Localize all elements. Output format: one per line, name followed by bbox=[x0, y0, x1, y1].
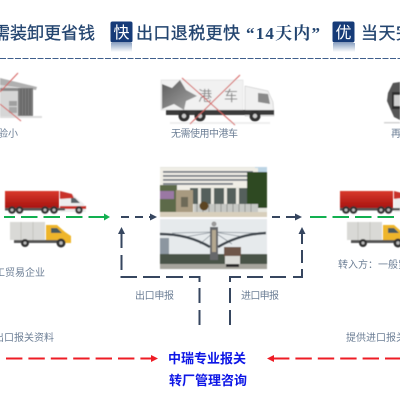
arrow: green right bbox=[310, 216, 400, 218]
header banner bbox=[0, 22, 400, 52]
icon: white and yellow truck left bbox=[10, 222, 71, 248]
arrow: red left bbox=[0, 355, 158, 362]
header text: fast refund: 出口退税更快 bbox=[136, 24, 240, 43]
icon: white and yellow truck right bbox=[347, 222, 400, 248]
badge: excellent: 优 bbox=[335, 24, 352, 42]
arrow: red right bbox=[267, 355, 400, 362]
icon: crossed-out port truck: 车 bbox=[224, 88, 238, 104]
right trucks bbox=[340, 191, 400, 248]
arrow: green left bbox=[4, 214, 110, 220]
center title: 中瑞专业报关 bbox=[168, 351, 246, 366]
label: import declaration: 进口申报 bbox=[241, 289, 279, 302]
badge: fast bbox=[110, 22, 132, 52]
arrow: navy to customs left bbox=[121, 214, 157, 220]
photo: customs building bbox=[160, 167, 267, 217]
icon: red truck left bbox=[5, 191, 86, 214]
left trucks bbox=[5, 191, 86, 248]
photo: customs gate bbox=[160, 219, 267, 269]
icon: red truck right bbox=[340, 191, 400, 214]
badge: excellent bbox=[332, 22, 355, 52]
icon: crossed-out port truck: 港 bbox=[198, 88, 212, 104]
label: port truck: 无需使用中港车 bbox=[171, 127, 238, 140]
badge: fast: 快 bbox=[113, 24, 130, 42]
label: export declaration: 出口申报 bbox=[135, 289, 174, 302]
icon: crossed-out port truck bbox=[161, 75, 274, 125]
icon: stopwatch bbox=[384, 82, 400, 124]
center title bbox=[168, 351, 247, 388]
arrow: navy to customs right bbox=[272, 214, 302, 220]
icon: crossed-out warehouse bbox=[0, 73, 42, 121]
center title: 转厂管理咨询 bbox=[169, 373, 247, 388]
arrow: export declaration path bbox=[118, 227, 200, 325]
arrow: import declaration path bbox=[230, 227, 306, 325]
header text: within 14 days: “14天内” bbox=[246, 23, 320, 43]
